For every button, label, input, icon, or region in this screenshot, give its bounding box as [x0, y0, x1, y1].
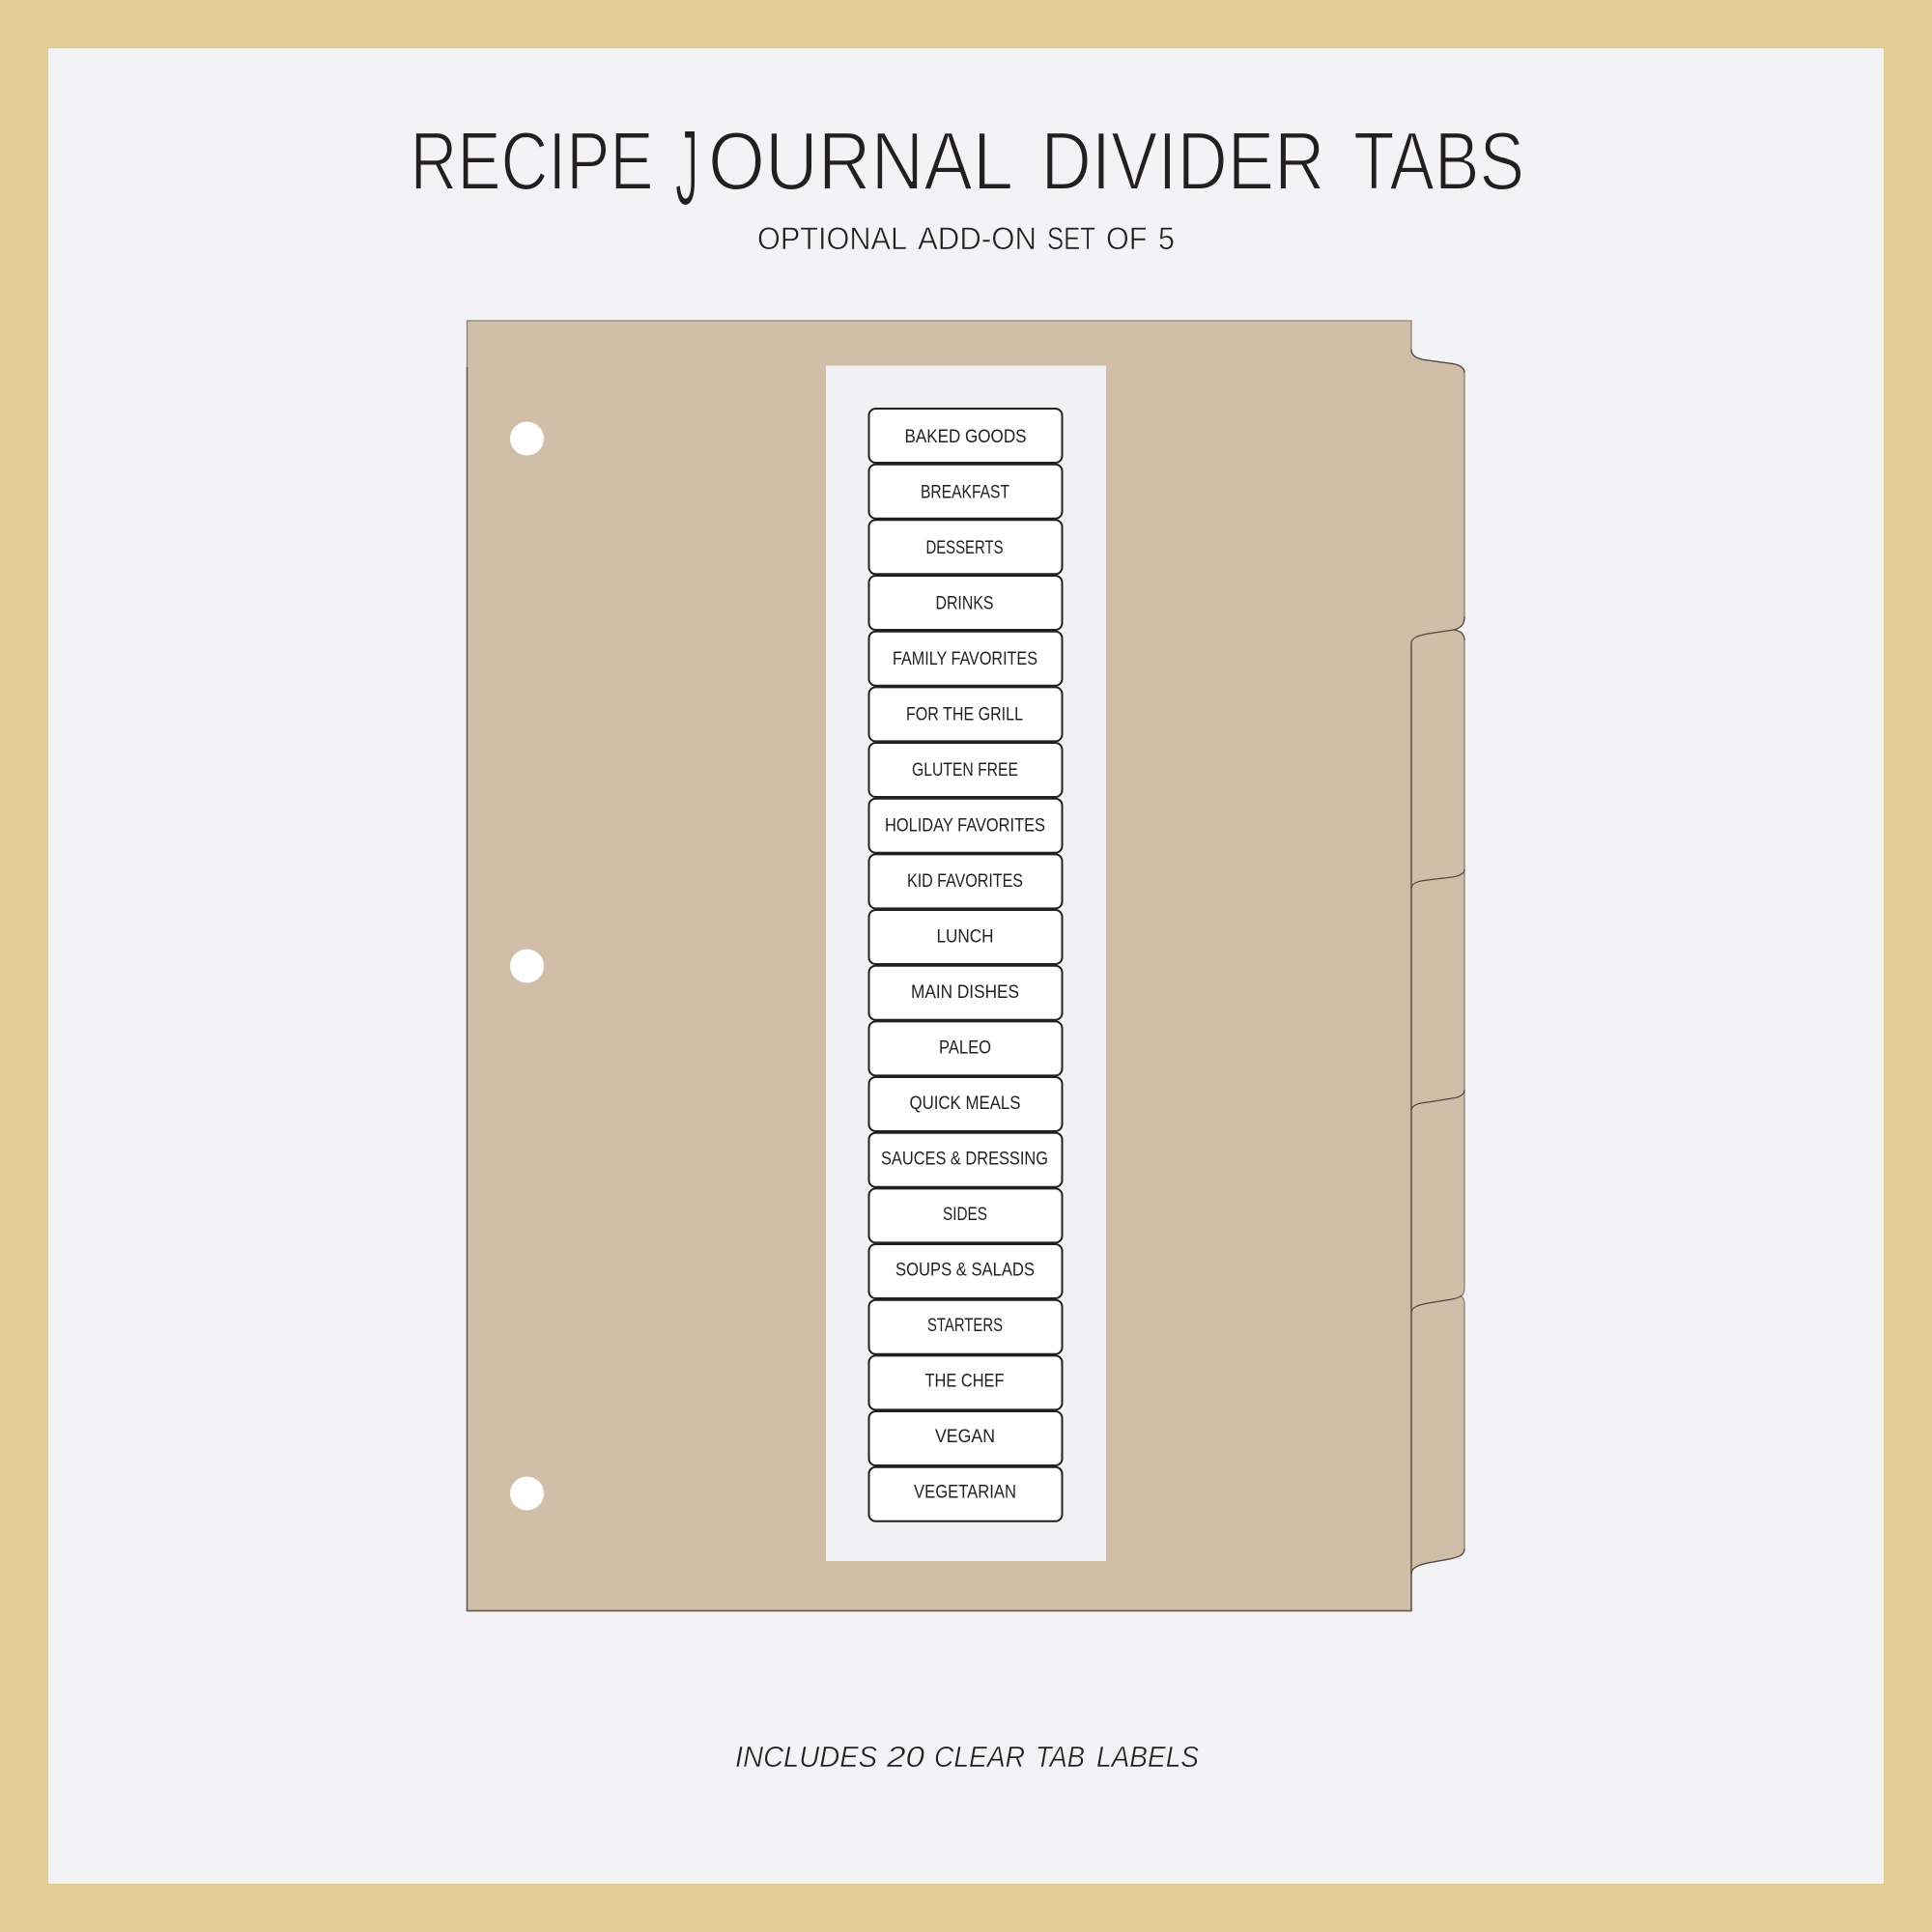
footer note: CLEAR	[934, 1740, 1025, 1774]
label: drinks	[869, 576, 1063, 630]
tab labels	[869, 409, 1063, 1521]
sheet left and bottom edges	[468, 367, 1411, 1611]
label: the chef	[869, 1355, 1063, 1409]
footer note: INCLUDES	[735, 1740, 877, 1774]
label: main dishes	[869, 966, 1063, 1020]
title: DIVIDER	[1041, 116, 1325, 208]
label: soups and salads: SOUPS & SALADS	[895, 1260, 1035, 1281]
label: vegan: VEGAN	[935, 1426, 995, 1447]
label: for the grill: FOR THE GRILL	[906, 703, 1023, 724]
label: starters	[869, 1300, 1063, 1354]
label: sides	[869, 1188, 1063, 1242]
label: gluten free	[869, 743, 1063, 797]
panel: tab label sheet	[826, 365, 1106, 1561]
label: family favorites: FAMILY FAVORITES	[893, 648, 1037, 669]
label: kid favorites: KID FAVORITES	[907, 870, 1023, 892]
spine edge line	[1410, 642, 1412, 1574]
label: paleo: PALEO	[939, 1037, 991, 1059]
footer note: TAB	[1036, 1740, 1085, 1774]
label: gluten free: GLUTEN FREE	[912, 759, 1018, 781]
label: holiday favorites	[869, 799, 1063, 853]
label: vegan	[869, 1411, 1063, 1465]
label: desserts: DESSERTS	[925, 537, 1004, 558]
label: main dishes: MAIN DISHES	[911, 981, 1019, 1003]
label: kid favorites	[869, 854, 1063, 908]
label: sauces and dressing: SAUCES & DRESSING	[881, 1148, 1048, 1169]
label: vegetarian	[869, 1467, 1063, 1521]
title: OURNAL	[708, 116, 1013, 208]
label: breakfast	[869, 465, 1063, 519]
subtitle: OF	[1106, 221, 1148, 256]
tab dividers	[1411, 350, 1464, 1574]
footer note: 20	[886, 1740, 924, 1774]
subtitle	[757, 221, 1175, 256]
sheet silhouette	[468, 321, 1464, 1611]
label: lunch: LUNCH	[937, 925, 993, 947]
label: paleo	[869, 1021, 1063, 1075]
label: soups and salads	[869, 1244, 1063, 1298]
footer note: LABELS	[1096, 1740, 1199, 1774]
subtitle: ADD-ON	[918, 221, 1037, 256]
label: the chef: THE CHEF	[925, 1370, 1005, 1391]
label: desserts	[869, 520, 1063, 574]
label: sauces and dressing	[869, 1133, 1063, 1187]
label: breakfast: BREAKFAST	[921, 481, 1009, 502]
label: holiday favorites: HOLIDAY FAVORITES	[885, 815, 1045, 837]
label: sides: SIDES	[943, 1204, 987, 1225]
subtitle: SET	[1047, 221, 1095, 256]
label: baked goods: BAKED GOODS	[904, 426, 1027, 447]
title: J	[675, 108, 698, 228]
label: starters: STARTERS	[927, 1315, 1003, 1336]
title	[410, 108, 1524, 228]
divider sheet with tabs	[468, 321, 1464, 1611]
label: lunch	[869, 910, 1063, 964]
label: family favorites	[869, 632, 1063, 686]
label: vegetarian: VEGETARIAN	[914, 1482, 1016, 1503]
label: quick meals: QUICK MEALS	[910, 1093, 1021, 1114]
subtitle: OPTIONAL	[757, 221, 907, 256]
subtitle: 5	[1158, 221, 1175, 256]
binder holes	[510, 421, 544, 1511]
title: RECIPE	[410, 116, 653, 208]
label: drinks: DRINKS	[935, 593, 994, 614]
title: TABS	[1353, 116, 1524, 208]
footer note	[735, 1740, 1199, 1774]
label: quick meals	[869, 1077, 1063, 1131]
label: baked goods	[869, 409, 1063, 463]
label: for the grill	[869, 687, 1063, 741]
